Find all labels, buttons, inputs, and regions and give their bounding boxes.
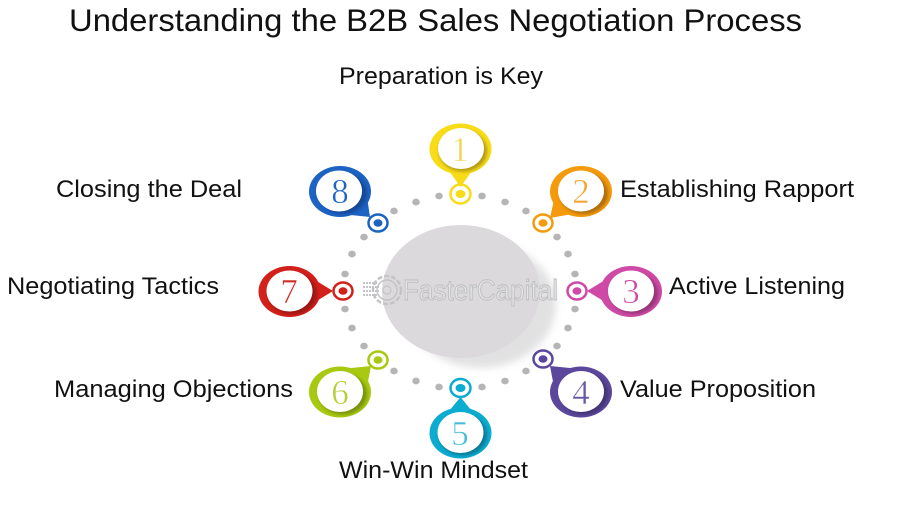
watermark: FasterCapital logo [363,275,558,307]
marker 8 [309,166,388,232]
label: Active Listening: Active Listening [669,273,845,300]
marker 5: 5 [451,414,469,453]
marker 6 [309,352,388,418]
marker 3 [568,266,662,317]
label: Closing the Deal: Closing the Deal [56,176,242,203]
label: Win-Win Mindset: Win-Win Mindset [339,457,528,484]
marker 7: 7 [280,272,298,311]
marker 1 [430,124,492,204]
marker 2 [534,166,612,232]
marker 5 [430,379,492,458]
marker 7 [258,266,352,317]
marker 1: 1 [451,130,469,169]
central disc [382,225,556,368]
marker 3: 3 [622,272,640,311]
marker 2: 2 [572,172,590,211]
label: Negotiating Tactics: Negotiating Tactics [7,273,219,300]
marker 4: 4 [572,373,590,412]
label: Establishing Rapport: Establishing Rapport [620,176,854,203]
watermark text: FasterCapital [403,275,558,307]
title: Understanding the B2B Sales Negotiation Process [69,2,802,38]
marker 4 [534,350,612,418]
icon: gear [363,276,401,304]
label: Value Proposition: Value Proposition [620,376,816,403]
label: Managing Objections: Managing Objections [54,376,293,403]
dotted ring [341,193,579,390]
marker 8: 8 [331,172,349,211]
label: Preparation is Key: Preparation is Key [339,63,543,90]
marker 6: 6 [331,373,349,412]
